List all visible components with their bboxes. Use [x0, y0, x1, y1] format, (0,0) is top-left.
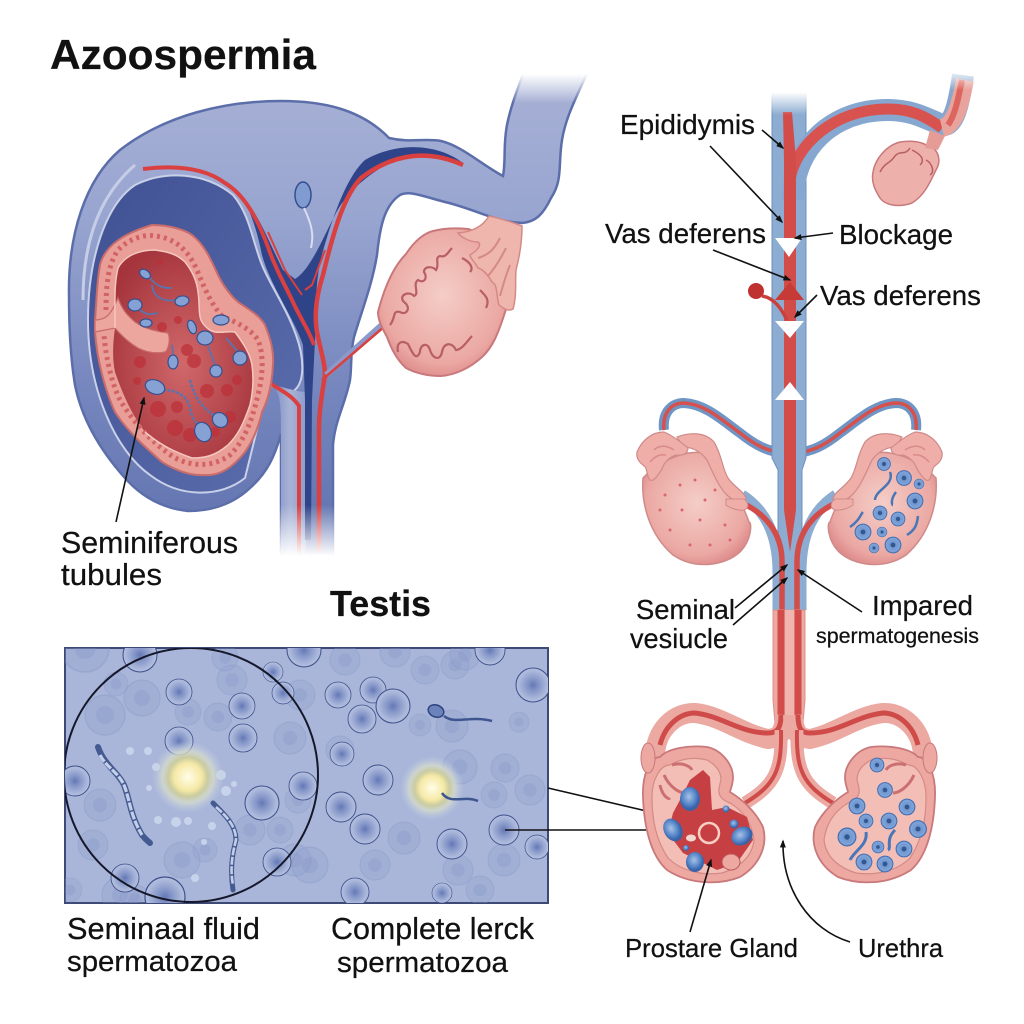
label: vas deferens right: Vas deferens: [820, 280, 981, 311]
tube fade bottom: [270, 505, 360, 573]
connector arrow to cell: [505, 829, 668, 831]
lateral right branch blue: [801, 495, 836, 610]
lower central duct: [773, 610, 805, 735]
worm sperm 2: [213, 803, 236, 890]
worm sperm 1 inner: [100, 755, 142, 835]
micrograph panel: [64, 647, 549, 904]
label: prostate gland: Prostare Gland: [625, 933, 798, 963]
lateral left branch red: [742, 503, 782, 610]
label: vas deferens left: Vas deferens: [605, 218, 766, 249]
bottom descending left: [745, 730, 781, 803]
hand finger creases: [478, 238, 510, 296]
small epididymis: [872, 130, 945, 205]
arrow: urethra: [783, 841, 850, 942]
arrow: seminal: [735, 565, 787, 608]
middle left arch blue: [664, 403, 785, 453]
central blue tube upper: [772, 93, 806, 560]
label: seminal fluid: Seminaal fluid: [67, 911, 260, 946]
red triangle: [775, 282, 804, 300]
red bulb: [748, 283, 787, 320]
main red branch: [790, 109, 942, 180]
worm sperm 1: [98, 747, 150, 843]
label: seminiferous tubules: Seminiferous: [61, 525, 238, 560]
fold ridges: [660, 764, 692, 798]
arrow: vesicle: [733, 578, 787, 625]
upper red end: [948, 80, 962, 125]
vessels: dark blue branching: [240, 147, 463, 540]
right bottom organ: [814, 743, 937, 882]
inner dark cavity: [88, 175, 302, 493]
illustration: testis cross-section with tract: [69, 58, 605, 573]
label: impared: Impared: [872, 590, 973, 621]
arrow: seminiferous: [116, 398, 144, 522]
upper pink tube end: [942, 80, 965, 128]
label: seminal: Seminal: [636, 594, 735, 625]
faint background cells: [65, 648, 546, 903]
lower duct red stripes: [781, 610, 798, 722]
sperm tail glow: [442, 793, 478, 801]
bottom right arch: [793, 713, 923, 757]
white triangle 2: [775, 321, 804, 338]
sperm head top right: [427, 704, 444, 718]
glow right: [403, 759, 462, 817]
label: blockage: Blockage: [839, 219, 953, 250]
white triangle 3: [775, 382, 804, 400]
lower duct center pale: [785, 610, 794, 730]
arrow: prostate: [690, 860, 711, 932]
label: spermatozoa: spermatozoa: [67, 946, 238, 978]
epididymis hand: [458, 216, 522, 310]
bottom left arch red: [660, 713, 781, 745]
bottom right arch red: [798, 713, 918, 745]
arrow: vas deferens right: [795, 295, 817, 317]
tubule wall pores: [104, 236, 262, 464]
small debris dots: [126, 747, 237, 882]
bottom descending left red: [745, 730, 781, 803]
sperm tail top right: [444, 716, 492, 721]
connector line to prostate: [548, 788, 672, 817]
inner wall light edge: [115, 250, 253, 458]
bottom descending right: [797, 730, 833, 803]
sperm in tubule: [128, 267, 247, 444]
middle red arch lines: [664, 403, 916, 453]
fold tongue: [95, 298, 169, 353]
blockage triangles: [775, 238, 802, 257]
title: Azoospermia: [50, 31, 317, 78]
worm sperm 2 inner: [216, 807, 236, 885]
glow left: [156, 742, 220, 810]
epididymis body: [378, 228, 507, 376]
lower tube body: [266, 384, 306, 570]
label: spermatogenesis: spermatogenesis: [816, 624, 979, 648]
vessels: left red branch: [143, 167, 314, 560]
hand bump right: [923, 743, 937, 773]
arrow: impared: [798, 570, 862, 612]
right mid testis: [828, 432, 942, 565]
lateral right branch red: [797, 503, 836, 610]
prostate left organ: [641, 743, 764, 882]
top right fade: [935, 58, 985, 90]
label: tubules: tubules: [61, 557, 162, 592]
branch to epididymis blue: [326, 322, 385, 375]
tube fade top: [505, 58, 605, 103]
heading: testis: Testis: [330, 583, 431, 624]
left mid testis: [637, 432, 751, 565]
red cluster: [668, 770, 753, 870]
highlight band: [83, 165, 135, 300]
arrow: epididymis to duct: [762, 130, 783, 148]
outlined cells: [65, 648, 548, 903]
sperm tails: [140, 278, 238, 424]
top fade: [765, 80, 815, 115]
arrow: blockage: [795, 233, 833, 238]
bottom left arch: [655, 713, 785, 757]
epididymis coils: [390, 248, 488, 358]
label: vesicle: vesiucle: [630, 623, 728, 654]
main blue branch: [793, 75, 963, 200]
urethra gap: [766, 745, 812, 885]
red blood cells: [133, 259, 242, 442]
arrow: vas deferens left: [713, 250, 790, 280]
small red connecting branches: [268, 232, 325, 295]
reproductive tract diagram: [637, 58, 985, 885]
large lens circle: [64, 648, 318, 902]
sperm in tract: [295, 182, 312, 248]
lower blue tube: [773, 555, 805, 611]
testis lumen: [113, 250, 253, 458]
bottom descending right red: [797, 730, 833, 803]
testis outer wall: [95, 225, 273, 475]
hand bump left: [641, 743, 655, 773]
branch to epididymis red: [322, 326, 385, 380]
label: spermatozoa 2: spermatozoa: [337, 947, 509, 979]
arrow: epididymis to lower duct: [710, 146, 782, 222]
label: epididymis: Epididymis: [620, 109, 755, 140]
vessels: right red branch: [316, 156, 463, 560]
label: complete lack: Complete lerck: [331, 912, 535, 946]
outer body shell: [69, 66, 590, 570]
middle right arch blue: [795, 403, 916, 453]
lateral left branch blue: [742, 495, 778, 610]
label: urethra: Urethra: [858, 933, 944, 963]
central red duct: [783, 112, 796, 552]
